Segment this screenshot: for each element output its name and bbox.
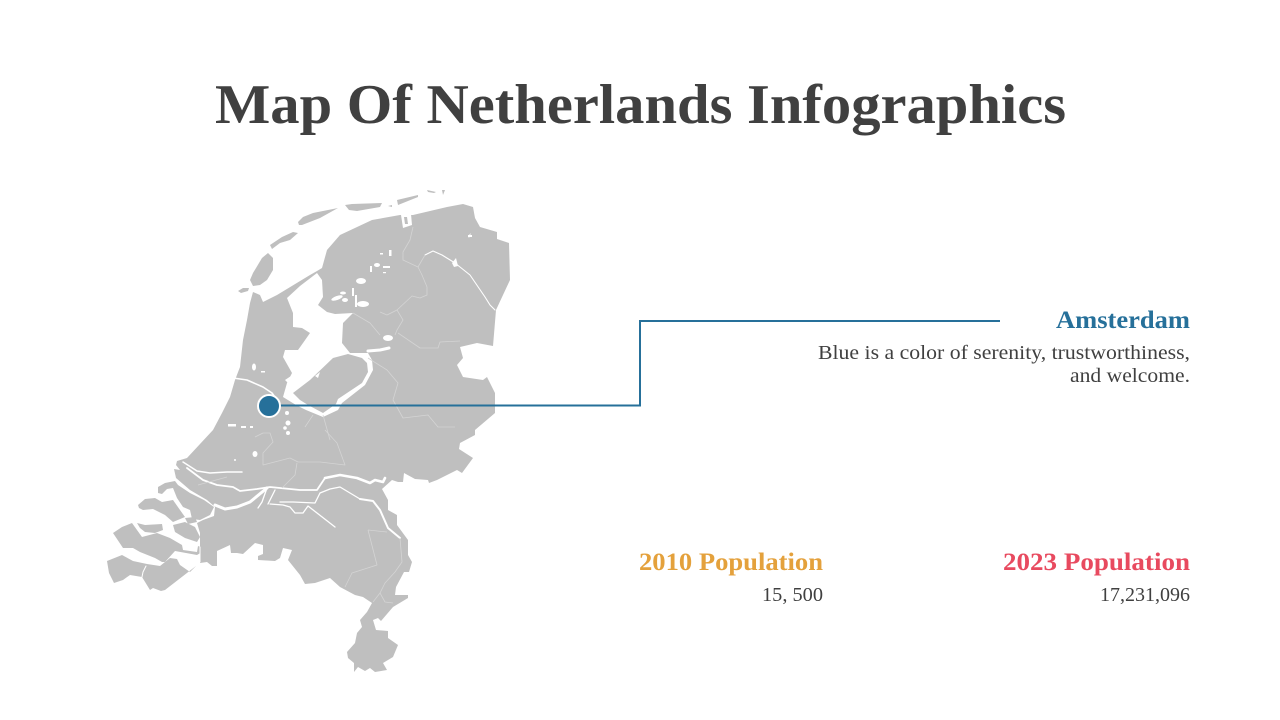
stat: 2023 population — [1003, 549, 1190, 606]
stat value: 15, 500 — [762, 584, 823, 606]
callout description — [818, 342, 1190, 387]
mainland — [174, 204, 510, 672]
stat heading: 2023 Population — [1003, 549, 1190, 576]
stat heading: 2010 Population — [639, 549, 823, 576]
IJsselmeer and Markermeer — [283, 273, 373, 417]
stat value: 17,231,096 — [1100, 584, 1190, 606]
title: Map Of Netherlands Infographics — [215, 74, 1066, 136]
stat: 2010 population — [639, 549, 823, 606]
Flevoland — [293, 354, 368, 413]
Wadden islands — [238, 190, 445, 293]
callout description: and welcome. — [1070, 365, 1190, 387]
Lauwersmeer land — [404, 217, 408, 224]
callout heading: Amsterdam — [1056, 307, 1190, 334]
location pin: Amsterdam — [258, 395, 280, 417]
small lakes — [228, 214, 472, 461]
callout description: Blue is a color of serenity, trustworthiness, — [818, 342, 1190, 364]
province borders — [198, 227, 460, 603]
map of the Netherlands — [107, 190, 510, 672]
rivers — [142, 251, 495, 577]
South Holland and Zeeland islands — [107, 481, 214, 591]
callout: Amsterdam — [818, 307, 1190, 387]
Texel island — [250, 253, 273, 286]
connector line — [279, 321, 1000, 406]
